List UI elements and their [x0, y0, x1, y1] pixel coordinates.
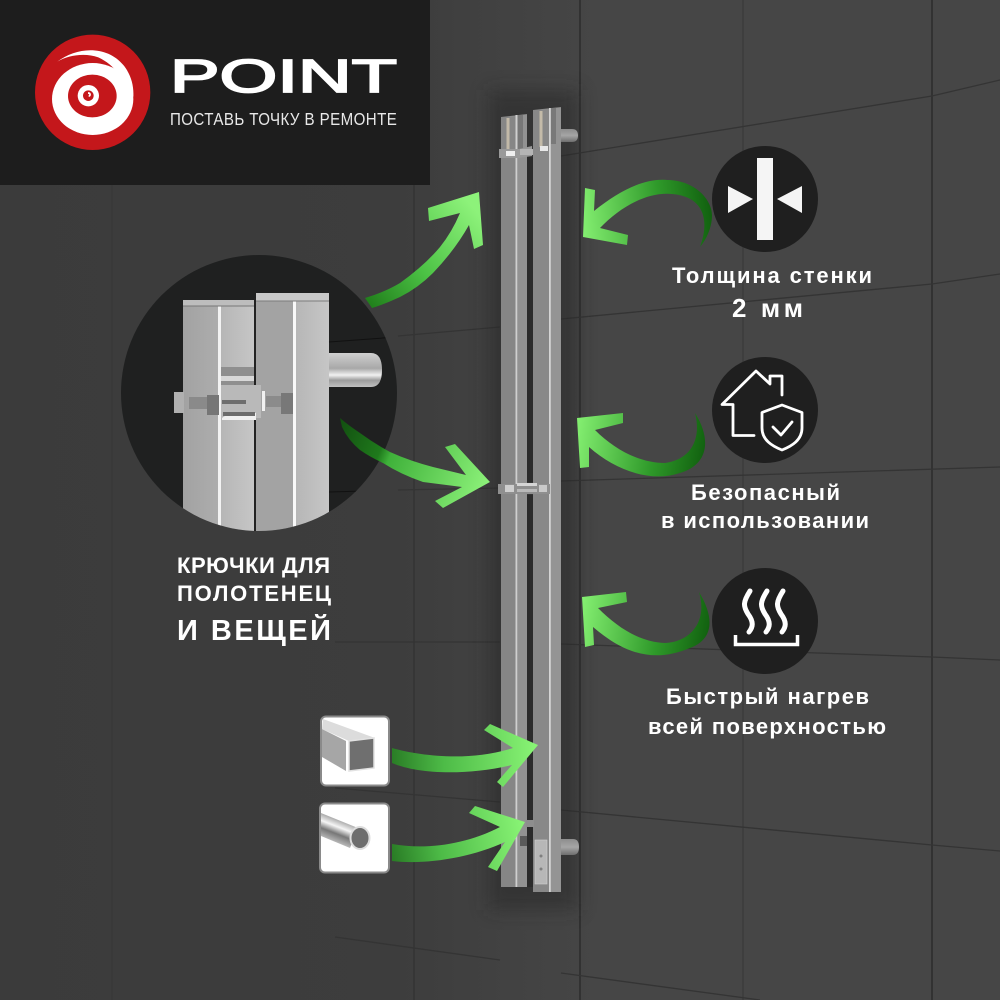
icon: wall thickness: [712, 146, 818, 252]
wall pipes: [561, 129, 579, 855]
arrow to safety: [577, 413, 705, 476]
gap shadow upper: [527, 157, 533, 482]
arrow from square profile: [392, 724, 538, 787]
icon: fast heating: [712, 568, 818, 674]
round tube icon: [321, 813, 370, 849]
gap shadow lower: [527, 495, 533, 887]
lower clamp: [520, 820, 534, 846]
heading: wall thickness: 2 мм: [732, 293, 803, 323]
arrow from round profile: [392, 806, 525, 871]
zoomed right tube: [256, 293, 329, 540]
wall line in circle: [329, 338, 386, 492]
left tube: [501, 114, 527, 887]
arrow to heating: [582, 592, 710, 655]
middle clamp: [498, 483, 550, 494]
heading: hooks: КРЮЧКИ ДЛЯ: [177, 553, 330, 578]
right tube: [533, 107, 561, 892]
control panel: [535, 840, 547, 884]
rail wall shadow: [488, 90, 578, 910]
square tube icon: [322, 719, 375, 771]
heading: heating: Быстрый нагрев: [666, 684, 869, 709]
arrow to wall thickness: [583, 180, 712, 247]
round profile tile: [320, 804, 389, 872]
heading: safety: в использовании: [661, 508, 869, 533]
zoom circle: hook detail: [121, 255, 397, 540]
top clamp: [499, 146, 548, 158]
logo spiral emblem: [35, 35, 150, 150]
heading: wall thickness: Толщина стенки: [672, 263, 872, 288]
heading: hooks: [177, 553, 331, 647]
arrow to top hook: [365, 192, 483, 308]
heading: hooks: И ВЕЩЕЙ: [177, 613, 331, 647]
zoomed left tube: [183, 300, 254, 540]
logo tagline: ПОСТАВЬ ТОЧКУ В РЕМОНТЕ: [170, 109, 397, 129]
arrow to middle hook: [340, 418, 490, 508]
zoomed gap: [254, 298, 256, 540]
logo panel: [0, 0, 430, 185]
icon: safe house: [712, 357, 818, 463]
heading: safety: [661, 480, 869, 533]
heading: hooks: ПОЛОТЕНЕЦ: [177, 581, 331, 606]
heading: heating: всей поверхностью: [648, 714, 886, 739]
heading: safety: Безопасный: [691, 480, 840, 505]
heading: wall thickness: [672, 263, 872, 323]
logo wordmark: POINT: [170, 50, 397, 102]
square profile tile: [321, 716, 389, 786]
zoomed pipe: [329, 353, 382, 387]
zoomed hook clamp: [174, 385, 293, 420]
towel rail: [498, 107, 579, 892]
heading: heating: [648, 684, 886, 739]
